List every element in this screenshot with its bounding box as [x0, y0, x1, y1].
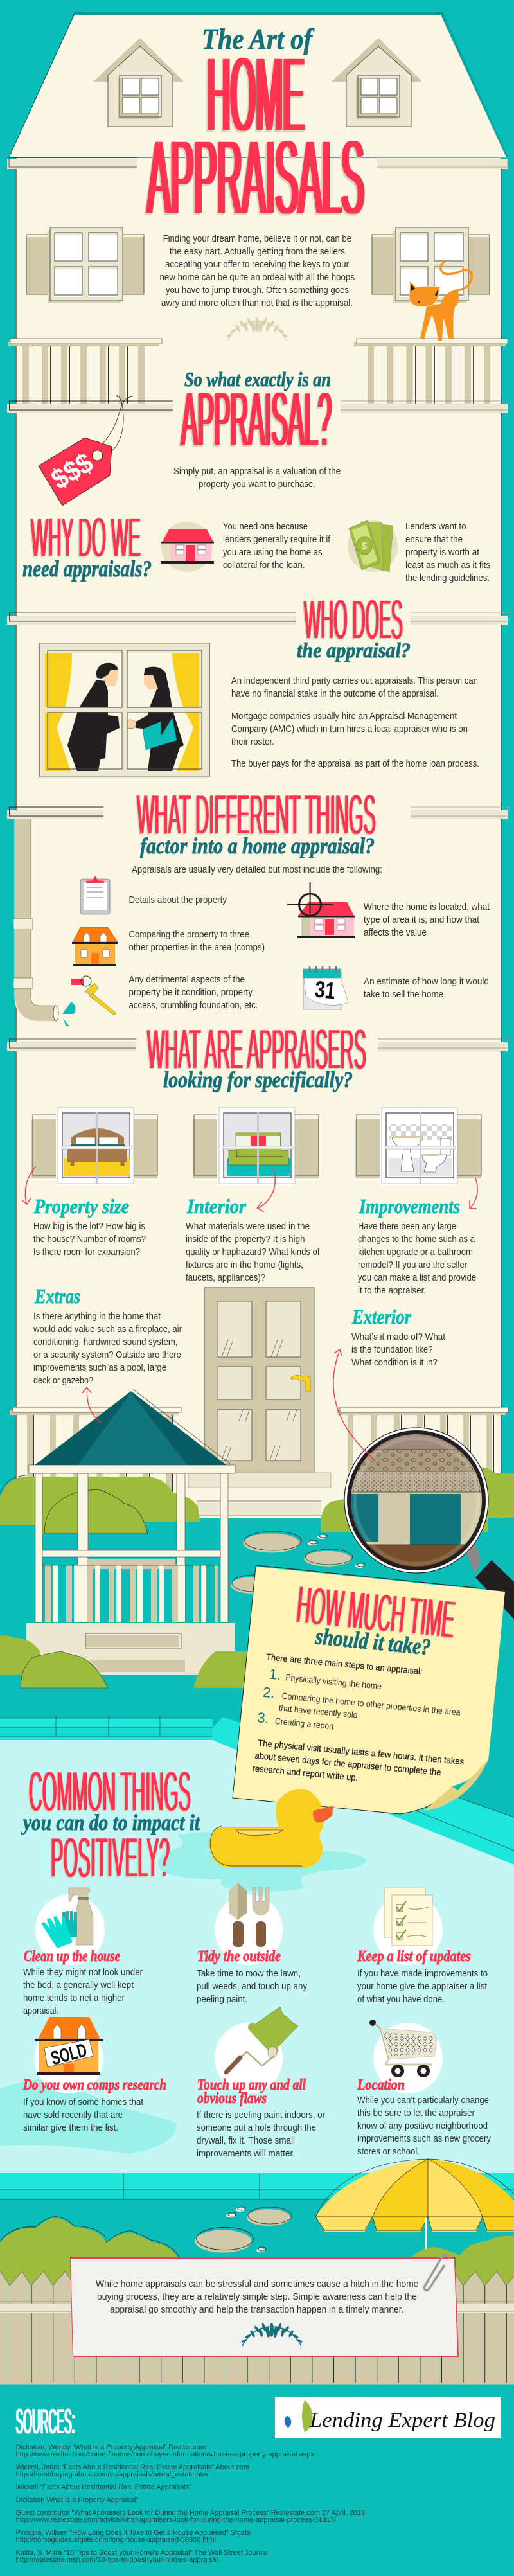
sources list: http://homeguides.sfgate.com/long-house-appraised-58806.html	[15, 2536, 216, 2544]
block: touch up flaws: obvious flaws	[197, 2090, 267, 2107]
icon: checklist	[373, 1887, 443, 1965]
text: who does the appraisal: their roster.	[231, 737, 274, 747]
block: touch up flaws: drywall, fix it. Those small	[197, 2136, 295, 2146]
block: location	[357, 2077, 492, 2157]
text: detrimental aspects: access, crumbling foundation, etc.	[128, 1000, 258, 1011]
block: touch up flaws: Touch up any and all	[197, 2077, 306, 2093]
block: location: this be sure to let the appraiser	[357, 2108, 475, 2119]
text: POSITIVELY?	[51, 1825, 170, 1889]
text: detrimental aspects	[128, 975, 258, 1011]
block: touch up flaws: improvements will matter.	[197, 2149, 295, 2159]
icon: gloves and spray	[35, 1888, 105, 1965]
back bushes	[0, 1468, 514, 1532]
text: physical visit: about seven days for the appraiser to complete the	[254, 1750, 441, 1777]
text: steps: Comparing the home to other properties in the area	[281, 1691, 461, 1718]
lower bushes	[0, 2217, 514, 2294]
sources list: http://homebuying.about.com/cs/appraisals/a/real_estate.htm	[15, 2471, 208, 2478]
text: steps: Creating a report	[274, 1716, 335, 1731]
rubber duck	[209, 1789, 333, 1868]
block: location: stores or school.	[357, 2147, 420, 2157]
text: lenders require: collateral for the loan.	[223, 560, 305, 571]
intro text	[159, 234, 355, 308]
icon: sold house: SOLD	[49, 2039, 89, 2070]
block: interior: What materials were used in the	[186, 1221, 310, 1232]
heading: so what exactly is an appraisal: So what exactly is an	[184, 368, 331, 391]
house facade: roof and wall	[9, 13, 508, 1520]
icon: sold house	[34, 2017, 103, 2093]
heading: common things	[21, 1759, 200, 1889]
text: detrimental aspects: Any detrimental aspects of the	[128, 975, 245, 985]
icon: trowel and fork	[215, 1883, 283, 1965]
text: lenders require: You need one because	[223, 522, 308, 532]
sources list: http://www.realestate.com/advice/what-appraisers-look-for-during-the-home-appraisal-process-51817/	[15, 2516, 337, 2524]
block: keep a list of updates: your home give the appraiser a list	[357, 1982, 487, 1992]
block: exterior	[351, 1305, 445, 1368]
text: appraisals detailed: Appraisals are usually very detailed but most include the following:	[132, 865, 382, 875]
text: where the home is: Where the home is located, what	[364, 902, 490, 912]
text: physical visit: research and report write up.	[252, 1763, 359, 1782]
block: improvements: kitchen upgrade or a bathroom	[358, 1247, 473, 1257]
text: steps: Physically visiting the home	[285, 1673, 382, 1691]
text: who does the appraisal: have no financial stake in the outcome of the appraisal.	[231, 689, 439, 699]
icon: calendar: 31	[314, 975, 337, 1004]
icon: clipboard	[80, 876, 110, 914]
right bush beside magnifier	[321, 1468, 514, 1532]
right upper balustrade	[337, 1407, 508, 1462]
sources list: Wickell “Facts About Residential Real Estate Appraisals”	[15, 2483, 191, 2491]
magnifying glass	[333, 1349, 514, 1619]
front left bush over lawn	[0, 1477, 200, 1534]
heading: so what exactly is an appraisal	[181, 368, 332, 462]
window: bathroom	[355, 1108, 481, 1186]
icon: price tag	[39, 395, 133, 506]
text: where the home is: affects the value	[364, 928, 427, 938]
block: extras: or a security system? Outside are there	[33, 1350, 181, 1360]
block: tidy the outside: pull weeds, and touch up any	[197, 1982, 308, 1992]
text: where the home is	[364, 902, 490, 938]
text: steps	[256, 1651, 465, 1745]
ornament: sand leaves	[226, 317, 288, 341]
block: keep a list of updates: of what you have done.	[357, 1994, 445, 2005]
text: comparing properties: Comparing the property to three	[128, 930, 249, 940]
window: living room	[193, 1108, 319, 1186]
text: physical visit	[252, 1737, 465, 1792]
pool coping corner and diagonal side	[213, 1716, 514, 1865]
block: touch up flaws: someone put a hole through the	[197, 2123, 316, 2133]
block: clean up the house: Clean up the house	[24, 1948, 120, 1965]
sources list: Kalita, S. Mitra “10 Tips to Boost your Home’s Appraisal” The Wall Street Journal	[15, 2549, 268, 2557]
sources list: http://realestate.msn.com/10-tips-to-boost-your-homes-appraisal	[15, 2556, 218, 2564]
block: exterior: is the foundation like?	[351, 1345, 433, 1355]
text: details about the property: Details about the property	[128, 895, 227, 905]
block: location: know of any positive neighborhood	[357, 2121, 488, 2131]
left balustrade	[7, 339, 173, 413]
text: lenders want to ensure: least as much as it fits	[405, 560, 490, 571]
window: bedroom	[31, 1108, 157, 1186]
teal lawn and pool deck	[0, 1518, 514, 1718]
text: lenders require: lenders generally require it if	[223, 535, 331, 545]
logo: lending expert blog	[275, 2397, 501, 2438]
text: comparing properties	[128, 930, 265, 953]
block: interior: Interior	[186, 1195, 246, 1218]
heading	[294, 1574, 457, 1660]
text: who does the appraisal	[231, 676, 479, 769]
icon: target on house	[287, 882, 355, 938]
block: improvements: Have there been any large	[358, 1221, 456, 1232]
text: who does the appraisal: Company (AMC) which in turn hires a local appraiser who is on	[231, 724, 468, 734]
block: property size: Property size	[33, 1195, 129, 1218]
heading: common things: you can do to impact it	[21, 1810, 200, 1835]
block: interior	[186, 1195, 320, 1283]
gazebo posts	[35, 1473, 228, 1622]
block: do your own comps research: Do you own comps research	[22, 2077, 166, 2093]
block: extras: Extras	[34, 1284, 80, 1308]
text: simply put	[173, 466, 341, 490]
block: clean up the house: While they might not look under	[23, 1968, 143, 1978]
block: extras: conditioning, hardwired sound system,	[33, 1337, 177, 1347]
text: lenders want to ensure: property is worth at	[405, 547, 479, 558]
sources list: Wickell, Janet “Facts About Residential Real Estate Appraisals” About.com	[15, 2464, 249, 2471]
text: simply put: property you want to purchase.	[199, 479, 315, 490]
arrow: exterior	[333, 1349, 373, 1459]
text: comparing properties: other properties in the area (comps)	[128, 943, 265, 953]
right dormer window	[332, 38, 422, 127]
text: steps: 3.	[256, 1709, 270, 1727]
folder	[143, 718, 177, 750]
ornament: teal leaves	[241, 2323, 303, 2346]
block: clean up the house: appraisal.	[23, 2006, 58, 2016]
block: tidy the outside: Tidy the outside	[197, 1948, 281, 1965]
block: interior: quality or haphazard? What kinds of	[186, 1247, 320, 1257]
icon: paint roller	[215, 2007, 298, 2093]
logo: lending expert blog: Lending Expert Blog	[309, 2409, 495, 2432]
gazebo railing	[42, 1550, 220, 1594]
roof eave	[7, 158, 508, 169]
block: do your own comps research	[22, 2077, 166, 2133]
note paper	[70, 2255, 459, 2357]
porch steps	[188, 1473, 331, 1515]
pool water	[0, 1740, 514, 2174]
intro text: new home can be quite an ordeal with all the hoops	[159, 272, 355, 283]
middle bush	[44, 1489, 148, 1534]
right window with shutters	[372, 227, 490, 303]
block: improvements	[358, 1195, 476, 1296]
icon: cash: $	[362, 541, 368, 552]
block: improvements: remodel? If you are the seller	[358, 1260, 467, 1270]
block: extras: would add value such as a fireplace, air	[33, 1324, 182, 1335]
paper: how much time	[233, 1565, 505, 1814]
heading: what different things	[137, 783, 376, 858]
title	[147, 22, 364, 237]
block: tidy the outside	[197, 1948, 308, 2005]
block: extras	[33, 1284, 182, 1386]
intro text: you have to jump through. Often something goes	[166, 285, 349, 296]
right balustrade	[341, 339, 510, 413]
closing text	[96, 2279, 419, 2315]
stepping stones	[231, 1531, 365, 1594]
text: simply put: Simply put, an appraisal is a valuation of the	[173, 466, 341, 477]
clasped hands	[125, 720, 136, 729]
icon: calendar	[303, 966, 348, 1009]
intro text: awry and more often than not that is the appraisal.	[161, 298, 353, 308]
gazebo	[26, 1389, 235, 1675]
block: location: While you can’t particularly change	[357, 2095, 489, 2106]
block: interior: fixtures are in the home (lights,	[186, 1260, 303, 1270]
pool coping top	[0, 1716, 213, 1740]
text: physical visit: The physical visit usually lasts a few hours. It then takes	[258, 1737, 465, 1766]
left window with shutters	[26, 227, 144, 303]
block: exterior: What condition is it in?	[351, 1358, 438, 1368]
icon: key	[71, 976, 116, 1015]
block: improvements: changes to the home such as a	[358, 1234, 475, 1245]
arrow: extras	[82, 1387, 102, 1423]
picket fence	[0, 2271, 514, 2384]
block: exterior: What’s it made of? What	[351, 1332, 445, 1342]
closing text: buying process, they are a relatively simple step. Simple awareness can help the	[97, 2292, 417, 2302]
gazebo roof	[35, 1389, 230, 1465]
block: extras: deck or gazebo?	[33, 1376, 93, 1386]
gazebo base	[26, 1623, 235, 1675]
block: do your own comps research: If you know of some homes that	[23, 2097, 143, 2108]
block: property size: How big is the lot? How big is	[33, 1221, 145, 1232]
arrow: improvements	[470, 1178, 477, 1209]
text: who does the appraisal: An independent third party carries out appraisals. This person can	[231, 676, 478, 686]
text: lenders want to ensure: the lending guidelines.	[405, 573, 490, 583]
text: steps: There are three main steps to an appraisal:	[266, 1651, 423, 1676]
text: steps: 1.	[269, 1666, 281, 1683]
block: interior: inside of the property? It is high	[186, 1234, 305, 1245]
block: improvements: Improvements	[359, 1195, 460, 1218]
text: who does the appraisal: The buyer pays for the appraisal as part of the home loan process.	[231, 759, 479, 769]
arrow: property size	[22, 1166, 36, 1204]
left dormer window	[93, 38, 184, 127]
intro text: accepting your offer to receiving the keys to your	[165, 260, 349, 270]
text: estimate of time: take to sell the home	[364, 990, 443, 1000]
block: interior: faucets, appliances)?	[186, 1273, 265, 1283]
block: location: improvements such as new grocery	[357, 2134, 492, 2144]
block: property size: the house? Number of rooms?	[33, 1234, 146, 1245]
block: do your own comps research: have sold recently that are	[23, 2110, 123, 2120]
block: keep a list of updates: If you have made improvements to	[357, 1969, 488, 1979]
illustration: handshake in window	[37, 643, 209, 779]
block: tidy the outside: Take time to mow the lawn,	[197, 1969, 301, 1979]
text: who does the appraisal: Mortgage companies usually hire an Appraisal Management	[231, 711, 457, 722]
woman figure	[136, 667, 184, 771]
drain pipe	[13, 819, 75, 1026]
heading: why do we need appraisals	[22, 506, 152, 582]
lower lawn	[0, 2202, 514, 2388]
block: clean up the house: the bed, a generally well kept	[23, 1980, 134, 1991]
heading: who does the appraisal: the appraisal?	[297, 639, 411, 662]
text: estimate of time	[364, 977, 489, 1000]
block: touch up flaws: If there is peeling paint indoors, or	[197, 2110, 325, 2120]
front door	[204, 1288, 314, 1473]
left water puddle	[0, 2079, 177, 2154]
text: lenders want to ensure: ensure that the	[405, 535, 463, 545]
text: estimate of time: An estimate of how long it would	[364, 977, 489, 987]
block: clean up the house	[23, 1948, 143, 2016]
block: keep a list of updates	[357, 1948, 488, 2005]
heading: what different things: factor into a home appraisal?	[140, 833, 375, 858]
text: lenders want to ensure	[405, 522, 490, 583]
closing text: appraisal go smoothly and help the transaction happen in a timely manner.	[110, 2305, 403, 2315]
block: improvements: you can make a list and provide	[358, 1273, 476, 1283]
eave band: what different things	[7, 807, 510, 819]
sources list: Dickstein, Wendy “What is a Property Appraisal” Realtor.com	[15, 2444, 206, 2451]
heading: who does the appraisal	[297, 589, 411, 662]
block: property size: Is there room for expansion?	[33, 1247, 140, 1257]
heading: why do we need appraisals: need appraisals?	[22, 556, 152, 582]
icon: orange cat	[409, 262, 472, 341]
lower stones	[195, 2207, 292, 2253]
water puddle around duck	[158, 1832, 367, 1891]
text: lenders want to ensure: Lenders want to	[405, 522, 466, 532]
block: exterior: Exterior	[351, 1305, 411, 1328]
heading: what are appraisers looking for: looking for specifically?	[163, 1067, 353, 1092]
text: COMMON THINGS	[29, 1759, 191, 1823]
sources list: http://www.realtor.com/home-finance/homebuyer-information/what-is-a-property-appraisal.aspx	[15, 2451, 314, 2458]
block: do your own comps research: similar give them the list.	[23, 2123, 118, 2133]
text: lenders require: you are using the home as	[223, 547, 323, 558]
text: detrimental aspects: property be it condition, property	[128, 988, 253, 998]
block: extras: Is there anything in the home that	[33, 1311, 161, 1322]
left upper balustrade	[10, 1407, 181, 1462]
sources list: Guest contributor “What Appraisers Look for During the Home Appraisal Process” Realestate.com 27 April, 2013	[15, 2509, 365, 2517]
block: extras: improvements such as a pool, large	[33, 1363, 166, 1373]
block: property size	[33, 1195, 146, 1257]
man figure	[67, 663, 120, 771]
sources list: Pirraglia, William “How Long Does it Take to Get a House Appraised” Sfgate	[15, 2529, 251, 2537]
block: clean up the house: home tends to net a higher	[23, 1993, 125, 2003]
sources list: Dickstein What is a Property Appraisal”	[15, 2496, 138, 2504]
text: steps: 2.	[262, 1684, 276, 1701]
eave band: who does	[7, 612, 510, 625]
pool coping bottom	[0, 2174, 514, 2199]
icon: shopping cart	[369, 2020, 443, 2093]
intro text: the easy part. Actually getting from the sellers	[170, 247, 345, 257]
bushes in front of gazebo	[0, 1635, 247, 1688]
text: where the home is: type of area it is, and how that	[364, 915, 479, 925]
arrow: interior	[257, 1169, 275, 1212]
icon: price tag: $$$	[46, 447, 98, 495]
text: WHY DO WE	[31, 506, 141, 569]
intro text: Finding your dream home, believe it or not, can be	[163, 234, 351, 244]
text: lenders require	[223, 522, 331, 571]
icon: orange house	[72, 927, 118, 966]
block: keep a list of updates: Keep a list of updates	[357, 1948, 471, 1965]
title: The Art of	[202, 22, 315, 55]
heading: what are appraisers looking for	[147, 1017, 366, 1092]
block: touch up flaws	[197, 2077, 325, 2159]
gazebo beam	[29, 1465, 235, 1473]
heading: should it take?	[314, 1623, 432, 1660]
umbrella canopy	[315, 2159, 514, 2252]
text: steps: that have recently sold	[278, 1703, 358, 1720]
icon: small red house	[161, 522, 214, 572]
handle	[465, 1543, 514, 1619]
text: SOURCES:	[15, 2401, 75, 2441]
closing text: While home appraisals can be stressful and sometimes cause a hitch in the home	[96, 2279, 419, 2289]
eave band: what are appraisers	[7, 1039, 510, 1051]
icon: paper clip	[424, 2255, 450, 2291]
sources list	[15, 2444, 365, 2564]
block: location: Location	[357, 2077, 405, 2093]
block: improvements: it to the appraiser.	[358, 1286, 426, 1296]
icon: cash	[348, 520, 398, 572]
block: tidy the outside: peeling paint.	[197, 1994, 247, 2005]
